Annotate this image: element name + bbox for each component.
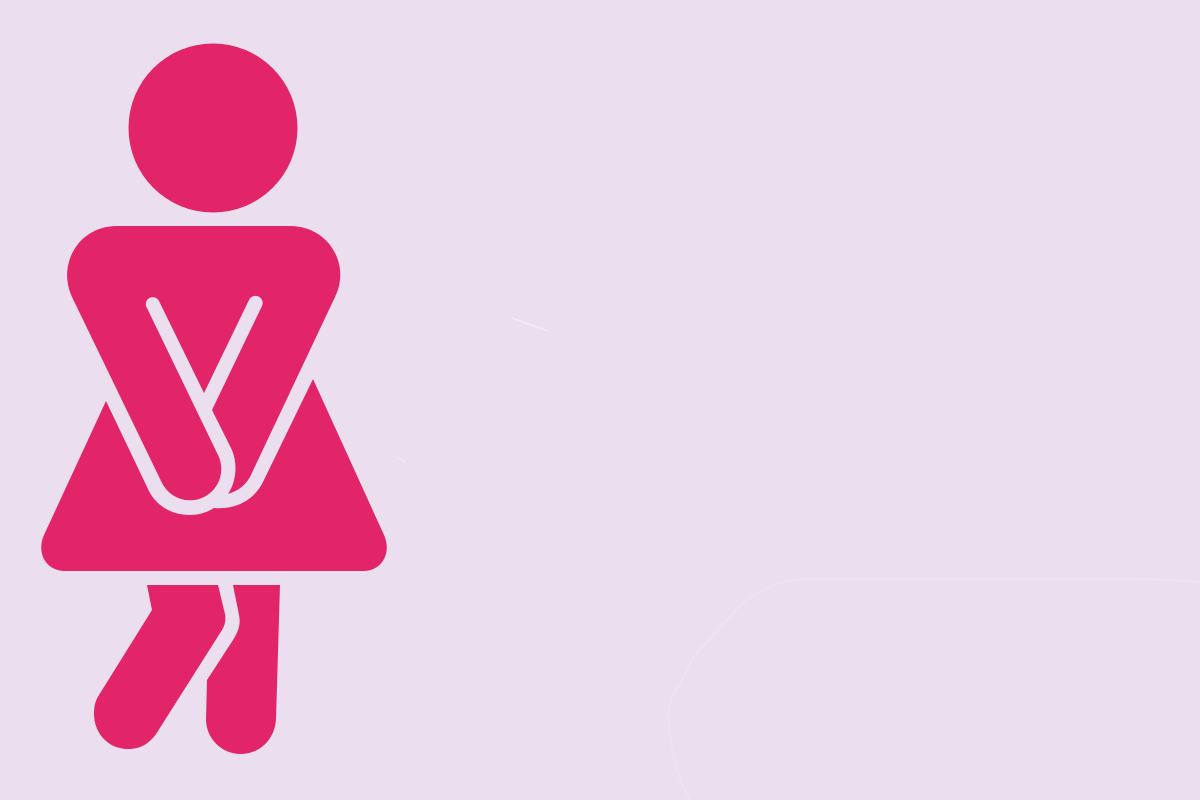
icon: woman figure	[41, 44, 387, 754]
skirt	[41, 379, 387, 571]
torso and crossed arms	[67, 226, 340, 500]
right leg	[206, 585, 280, 754]
faint artifact lines on background	[397, 318, 1200, 800]
left leg	[94, 585, 225, 749]
head	[128, 44, 298, 212]
